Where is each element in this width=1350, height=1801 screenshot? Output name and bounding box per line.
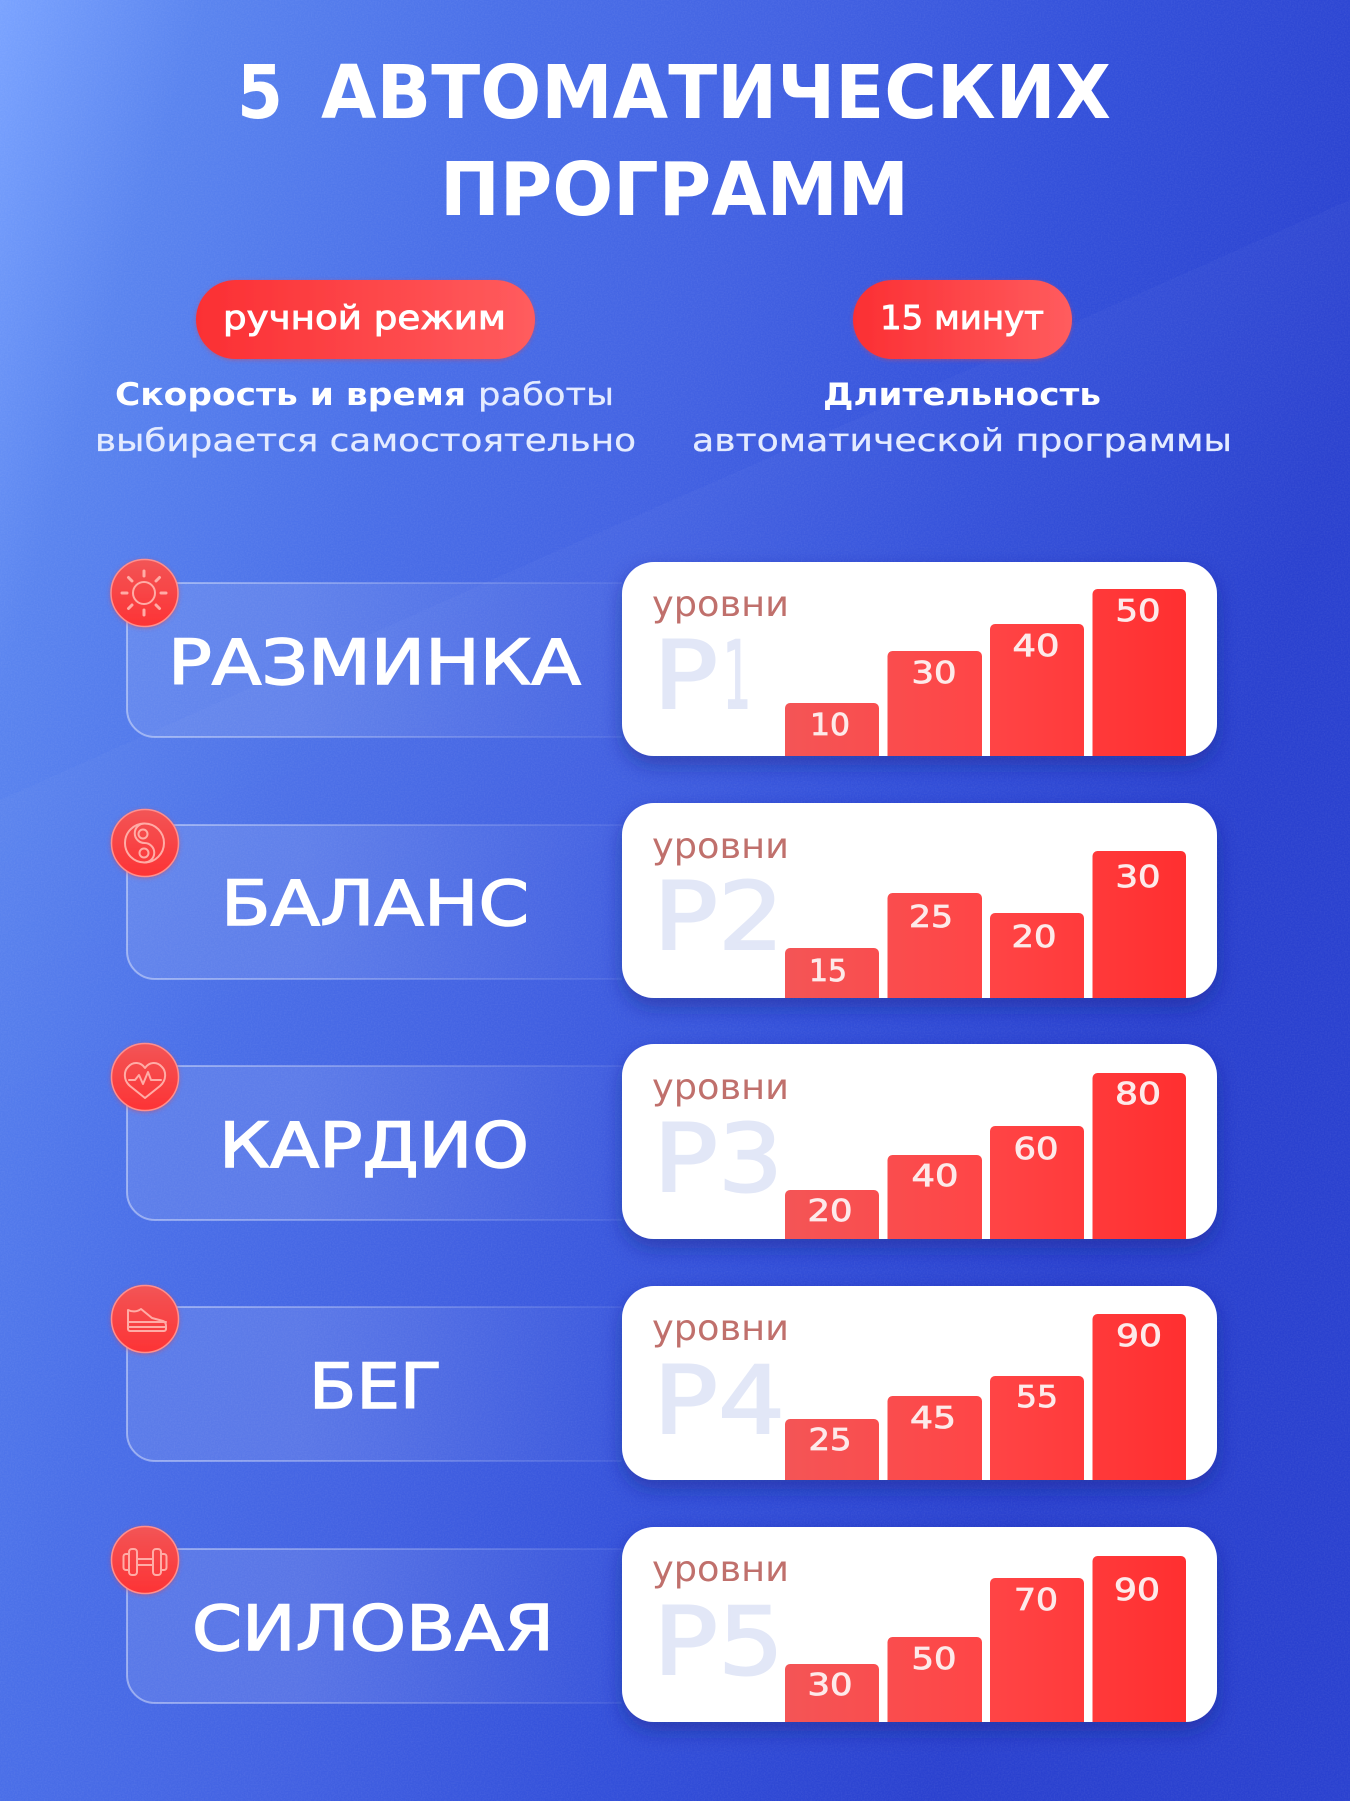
panel: КАРДИО (127, 1066, 622, 1220)
panel: БАЛАНС (127, 825, 622, 979)
panel: СИЛОВАЯ (127, 1549, 622, 1703)
panel: РАЗМИНКА: РАЗМИНКА (168, 626, 581, 699)
icon: sun (111, 560, 178, 626)
bar chart: P5: 30 (808, 1668, 852, 1703)
program code: P3: P (653, 1105, 718, 1214)
bar chart: P3: 80 (1115, 1077, 1161, 1112)
text block: duration: автоматической программы (692, 423, 1232, 459)
caption: levels: уровни (652, 1067, 789, 1108)
text block: duration: Длительность (823, 377, 1101, 413)
bar chart: P3: 20 (808, 1194, 852, 1229)
caption: levels: уровни (652, 826, 789, 867)
bar chart: P5: 90 (1114, 1573, 1160, 1608)
text block: speed and time: Скорость и время (115, 377, 466, 413)
bar chart: P5 (785, 1556, 1186, 1722)
levels card: P4 (622, 1286, 1217, 1480)
caption: levels: уровни (652, 584, 789, 625)
levels card: P2 (622, 803, 1217, 998)
bar chart: P2: 15 (809, 954, 847, 989)
program code: P4: P (653, 1347, 718, 1456)
icon: sneaker (112, 1286, 178, 1352)
badge: 15 minutes: 15 минут (880, 298, 1044, 337)
title: 5 (237, 50, 283, 136)
levels card: P3 (622, 1044, 1217, 1239)
bar chart: P5: 70 (1014, 1583, 1058, 1618)
icon: yin yang (112, 810, 178, 876)
bar chart: P1: 40 (1012, 629, 1060, 664)
bar chart: P5: 50 (912, 1642, 956, 1677)
text block: speed and time (95, 377, 636, 459)
bar chart: P1: 50 (1116, 594, 1160, 629)
bar chart: P3 (785, 1073, 1186, 1239)
levels card: P5 (622, 1527, 1217, 1722)
text block: duration (692, 377, 1232, 459)
badge: manual mode: ручной режим (223, 298, 506, 337)
bar chart: P4: 90 (1116, 1319, 1162, 1354)
bar chart: P2: 20 (1012, 920, 1056, 955)
program code: P3: 3 (718, 1105, 783, 1214)
panel: БЕГ (127, 1307, 622, 1461)
program code: P3 (653, 1105, 783, 1214)
panel: БЕГ: БЕГ (309, 1350, 442, 1423)
bar chart: P3: 60 (1014, 1132, 1058, 1167)
program code: P2: P (653, 863, 718, 972)
program code: P5: P (653, 1588, 718, 1697)
caption: levels: уровни (652, 1308, 789, 1349)
bar chart: P4: 45 (910, 1401, 956, 1436)
text block: speed and time: работы (478, 377, 614, 413)
icon: dumbbell (112, 1526, 178, 1594)
program code: P5 (653, 1588, 784, 1697)
program code: P1 (653, 622, 751, 731)
text block: speed and time: выбирается самостоятельно (95, 423, 636, 459)
caption: levels: уровни (652, 1549, 789, 1590)
panel: КАРДИО: КАРДИО (219, 1109, 529, 1182)
icon: heart (112, 1044, 178, 1110)
panel: СИЛОВАЯ: СИЛОВАЯ (192, 1592, 554, 1665)
bar chart: P1: 30 (912, 656, 956, 691)
bar chart: P2 (785, 851, 1186, 998)
bar chart: P4: 25 (808, 1423, 852, 1458)
title: АВТОМАТИЧЕСКИХ (321, 50, 1111, 136)
levels card: P1 (622, 562, 1217, 756)
bar chart: P2: 25 (909, 900, 953, 935)
program code: P1: P (653, 622, 718, 731)
title (237, 50, 1111, 233)
program code: P4 (653, 1347, 785, 1456)
title: ПРОГРАММ (440, 147, 909, 233)
bar chart: P2: 30 (1116, 860, 1160, 895)
bar chart: P1 (785, 589, 1186, 756)
badge: manual mode (196, 280, 535, 359)
program code: P2 (653, 863, 784, 972)
bar chart: P3: 40 (912, 1159, 958, 1194)
bar chart: P4 (785, 1314, 1186, 1480)
panel: РАЗМИНКА (127, 583, 622, 737)
badge: 15 minutes (853, 280, 1072, 359)
levels card: P1: 1 (723, 622, 751, 731)
program code: P2: 2 (718, 863, 784, 972)
bar chart: P4: 55 (1016, 1380, 1058, 1415)
program code: P5: 5 (718, 1588, 784, 1697)
panel: БАЛАНС: БАЛАНС (221, 867, 529, 940)
program code: P4: 4 (718, 1347, 785, 1456)
bar chart: P1: 10 (810, 708, 850, 743)
